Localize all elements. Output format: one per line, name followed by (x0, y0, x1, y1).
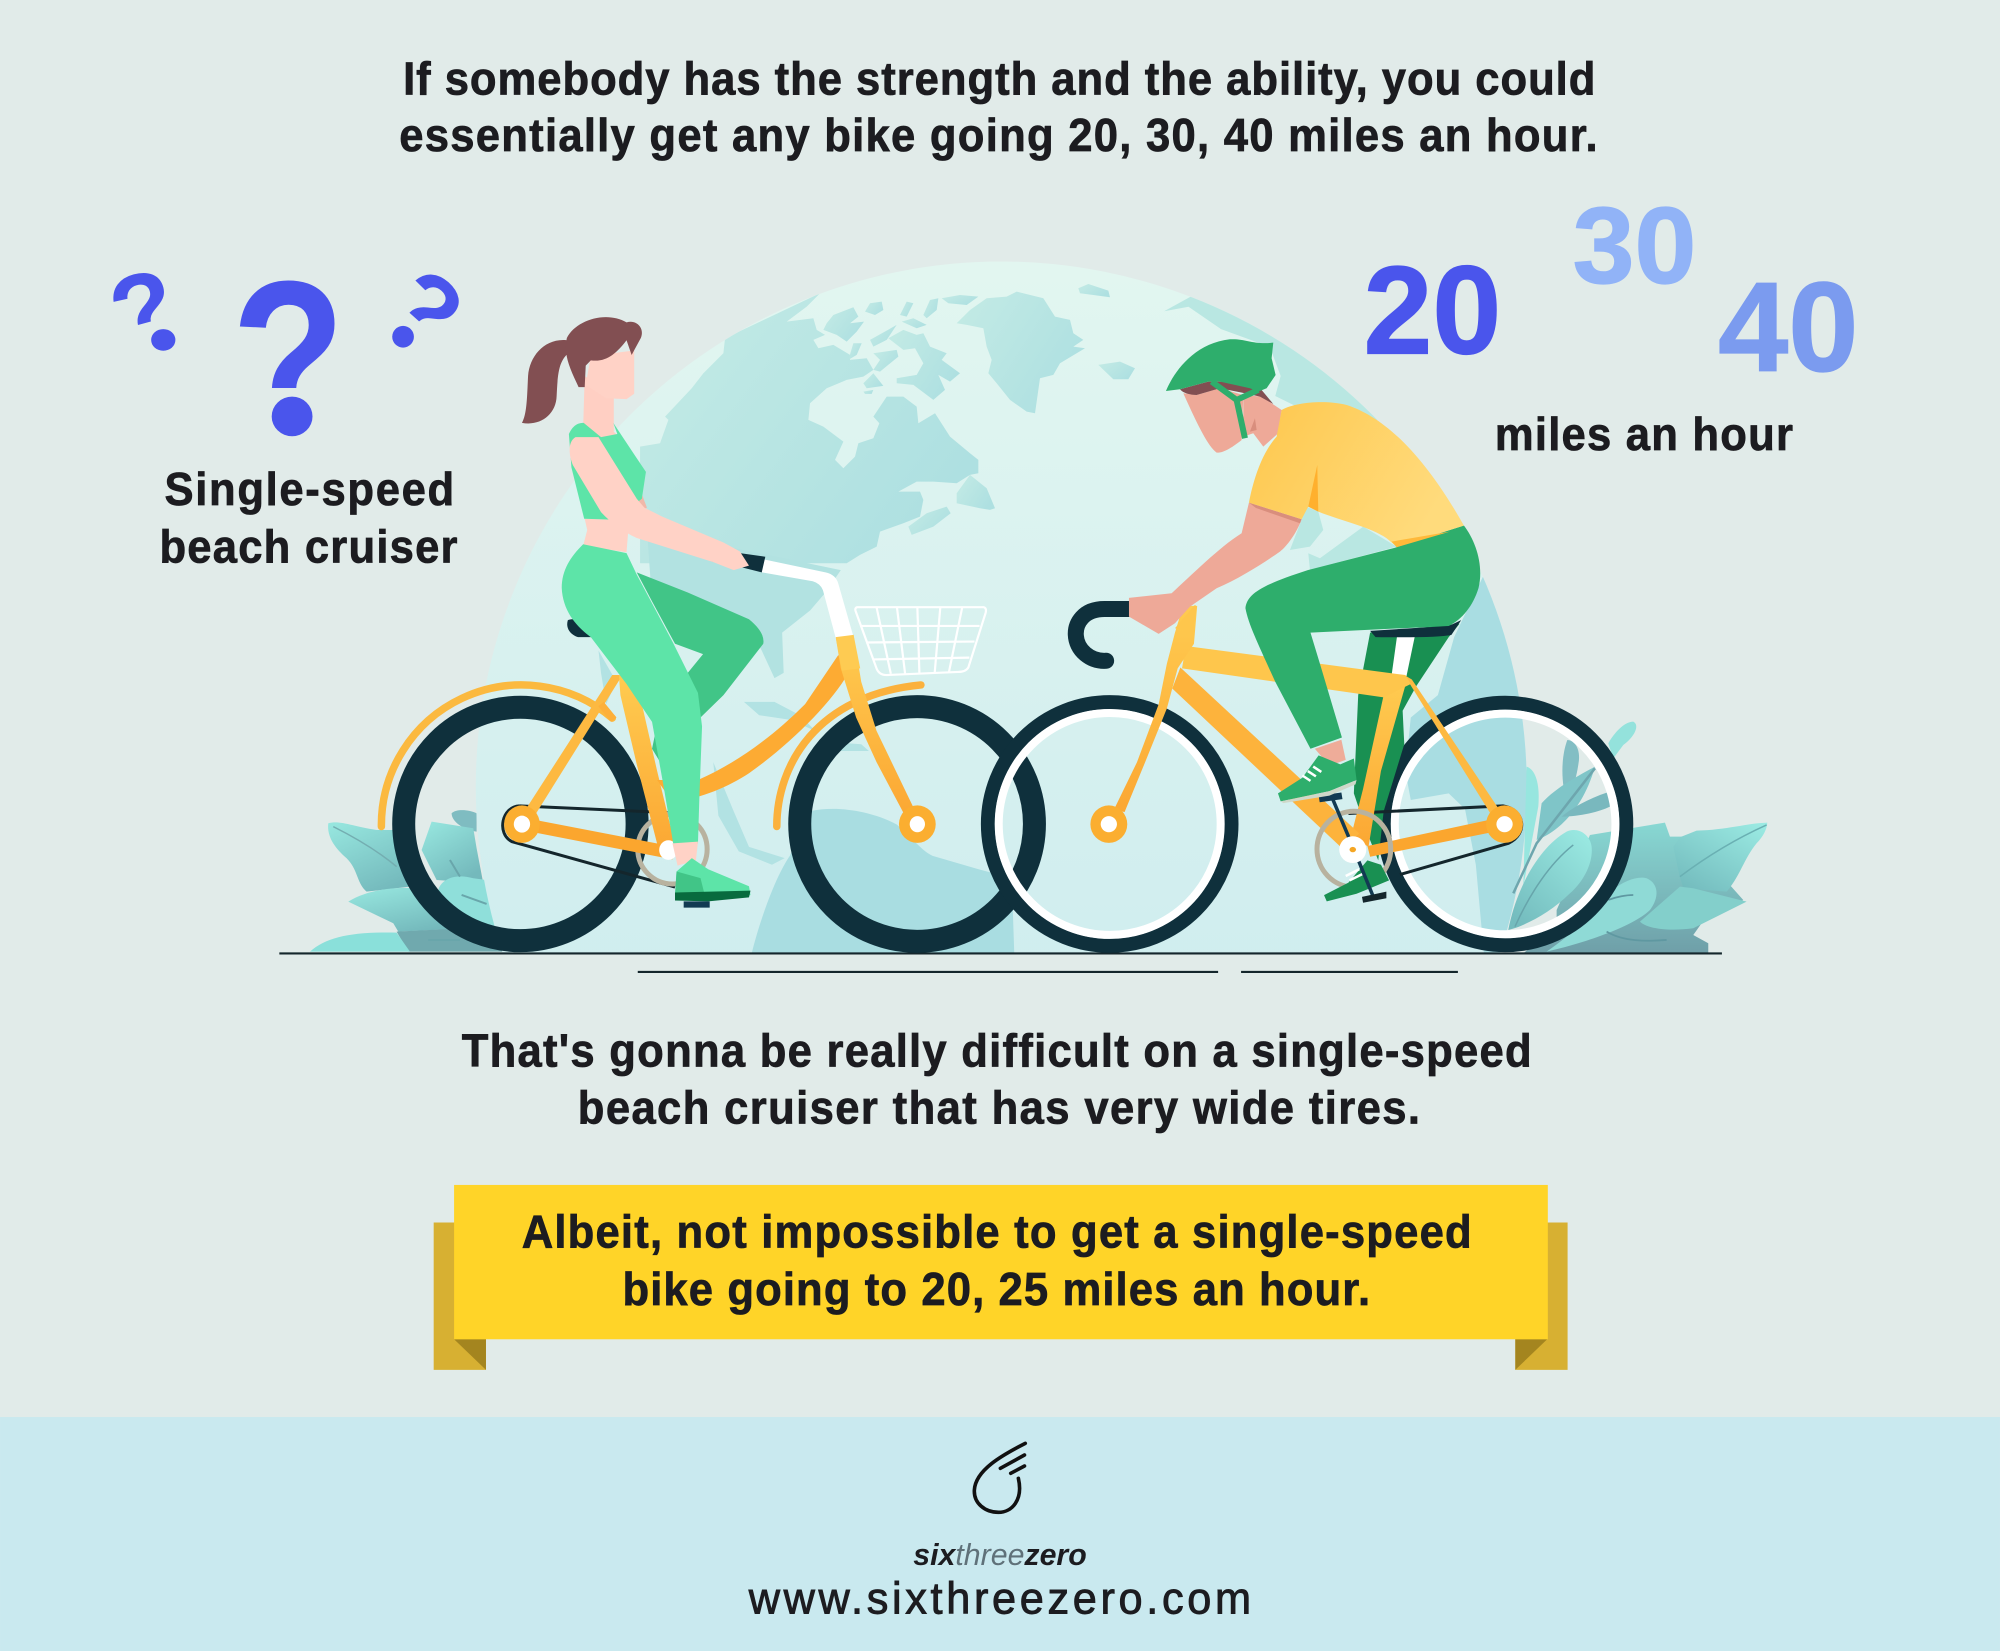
speed numbers (1364, 185, 1858, 399)
small right question mark (392, 274, 459, 348)
handlebar (762, 559, 854, 638)
large question mark: ? (231, 236, 345, 481)
icon: question marks (113, 273, 459, 436)
rear wheel: right bike (1384, 703, 1626, 945)
saddle (567, 619, 595, 637)
ankle (672, 842, 698, 866)
heading quote: If somebody has the strength and the ability, you could (403, 53, 1595, 105)
handlebar (1076, 609, 1129, 661)
front wheel: right bike (988, 702, 1232, 946)
speed numbers: 30 (1573, 185, 1696, 306)
plants: right bush (1508, 722, 1767, 953)
face (586, 351, 634, 399)
near arm (570, 437, 749, 570)
man on road bike (988, 339, 1626, 946)
hubs (504, 805, 540, 843)
crank and pedals (1332, 798, 1374, 898)
ribbon fold right (1515, 1339, 1547, 1370)
woman on cruiser bike (381, 317, 1034, 941)
frame (1404, 675, 1502, 818)
hair (1180, 382, 1273, 404)
logo icon (974, 1443, 1025, 1512)
crank hub (1339, 836, 1366, 863)
large question mark (240, 280, 334, 436)
map: eurasia and africa (1164, 280, 1541, 954)
label: single-speed beach cruiser: Single-speed (165, 464, 454, 515)
heading quote (399, 53, 1598, 161)
basket (855, 607, 986, 675)
ribbon fold left (454, 1339, 486, 1370)
near leg (562, 544, 702, 845)
chainring (1317, 811, 1391, 887)
saddle (1370, 620, 1461, 637)
frame (524, 675, 622, 816)
body text: beach cruiser that has very wide tires. (578, 1083, 1420, 1134)
front wheel ring: left bike (800, 707, 1034, 941)
hubs (1090, 805, 1127, 843)
label: single-speed beach cruiser (159, 464, 458, 573)
ribbon tail left (434, 1223, 486, 1370)
seat post (1392, 635, 1415, 676)
body text (462, 1025, 1532, 1134)
arm (1129, 503, 1302, 634)
rear wheel ring: left bike (404, 707, 637, 941)
yellow ribbon banner (434, 1185, 1568, 1370)
small left question mark: ? (98, 246, 188, 372)
small left question mark (113, 273, 176, 351)
crop top (569, 423, 646, 520)
far leg (1354, 624, 1460, 860)
ankle (1315, 740, 1346, 766)
far shoe (1324, 860, 1389, 901)
small right question mark: ? (365, 247, 484, 371)
shoe (675, 858, 751, 898)
chain (1348, 806, 1522, 875)
ground lines (279, 953, 1722, 972)
heading quote: essentially get any bike going 20, 30, 40 miles an hour. (399, 110, 1598, 161)
ribbon tail right (1515, 1223, 1568, 1370)
map: lower hemisphere land (598, 530, 1014, 954)
helmet strap (1212, 382, 1258, 438)
chainring (638, 814, 707, 884)
label: single-speed beach cruiser: beach cruiser (159, 521, 458, 573)
globe (476, 262, 1526, 952)
hair ponytail (522, 340, 568, 423)
speed numbers: 20 (1364, 241, 1501, 380)
speed numbers: 40 (1718, 257, 1858, 399)
far leg (637, 572, 763, 717)
trousers (1245, 526, 1480, 749)
plants: left bush (310, 810, 510, 952)
map: land under rider arm (1290, 507, 1397, 570)
banner text (522, 1206, 1472, 1315)
fenders (381, 685, 921, 827)
neck and far shoulder (583, 376, 637, 467)
label: miles an hour: miles an hour (1495, 409, 1793, 461)
helmet (1166, 339, 1276, 392)
banner text: bike going to 20, 25 miles an hour. (622, 1264, 1370, 1315)
shirt (1249, 402, 1464, 547)
face (1183, 388, 1243, 453)
website url: www.sixthreezero.com (748, 1574, 1251, 1624)
ribbon face (454, 1185, 1548, 1339)
neck (1243, 395, 1282, 447)
footer band (0, 1417, 2000, 1651)
frame top over hand (1175, 605, 1197, 632)
far arm (637, 481, 647, 512)
hair (566, 317, 642, 387)
chain (503, 806, 675, 887)
waist (583, 519, 629, 552)
near shoe (1278, 755, 1357, 801)
logo wordmark: sixthreezero (913, 1538, 1087, 1572)
body text: That's gonna be really difficult on a single-speed (462, 1025, 1532, 1077)
rear fender stay (601, 704, 614, 720)
banner text: Albeit, not impossible to get a single-speed (522, 1206, 1472, 1258)
map: north america and arctic (640, 284, 1135, 563)
rider upper body (1129, 339, 1464, 634)
